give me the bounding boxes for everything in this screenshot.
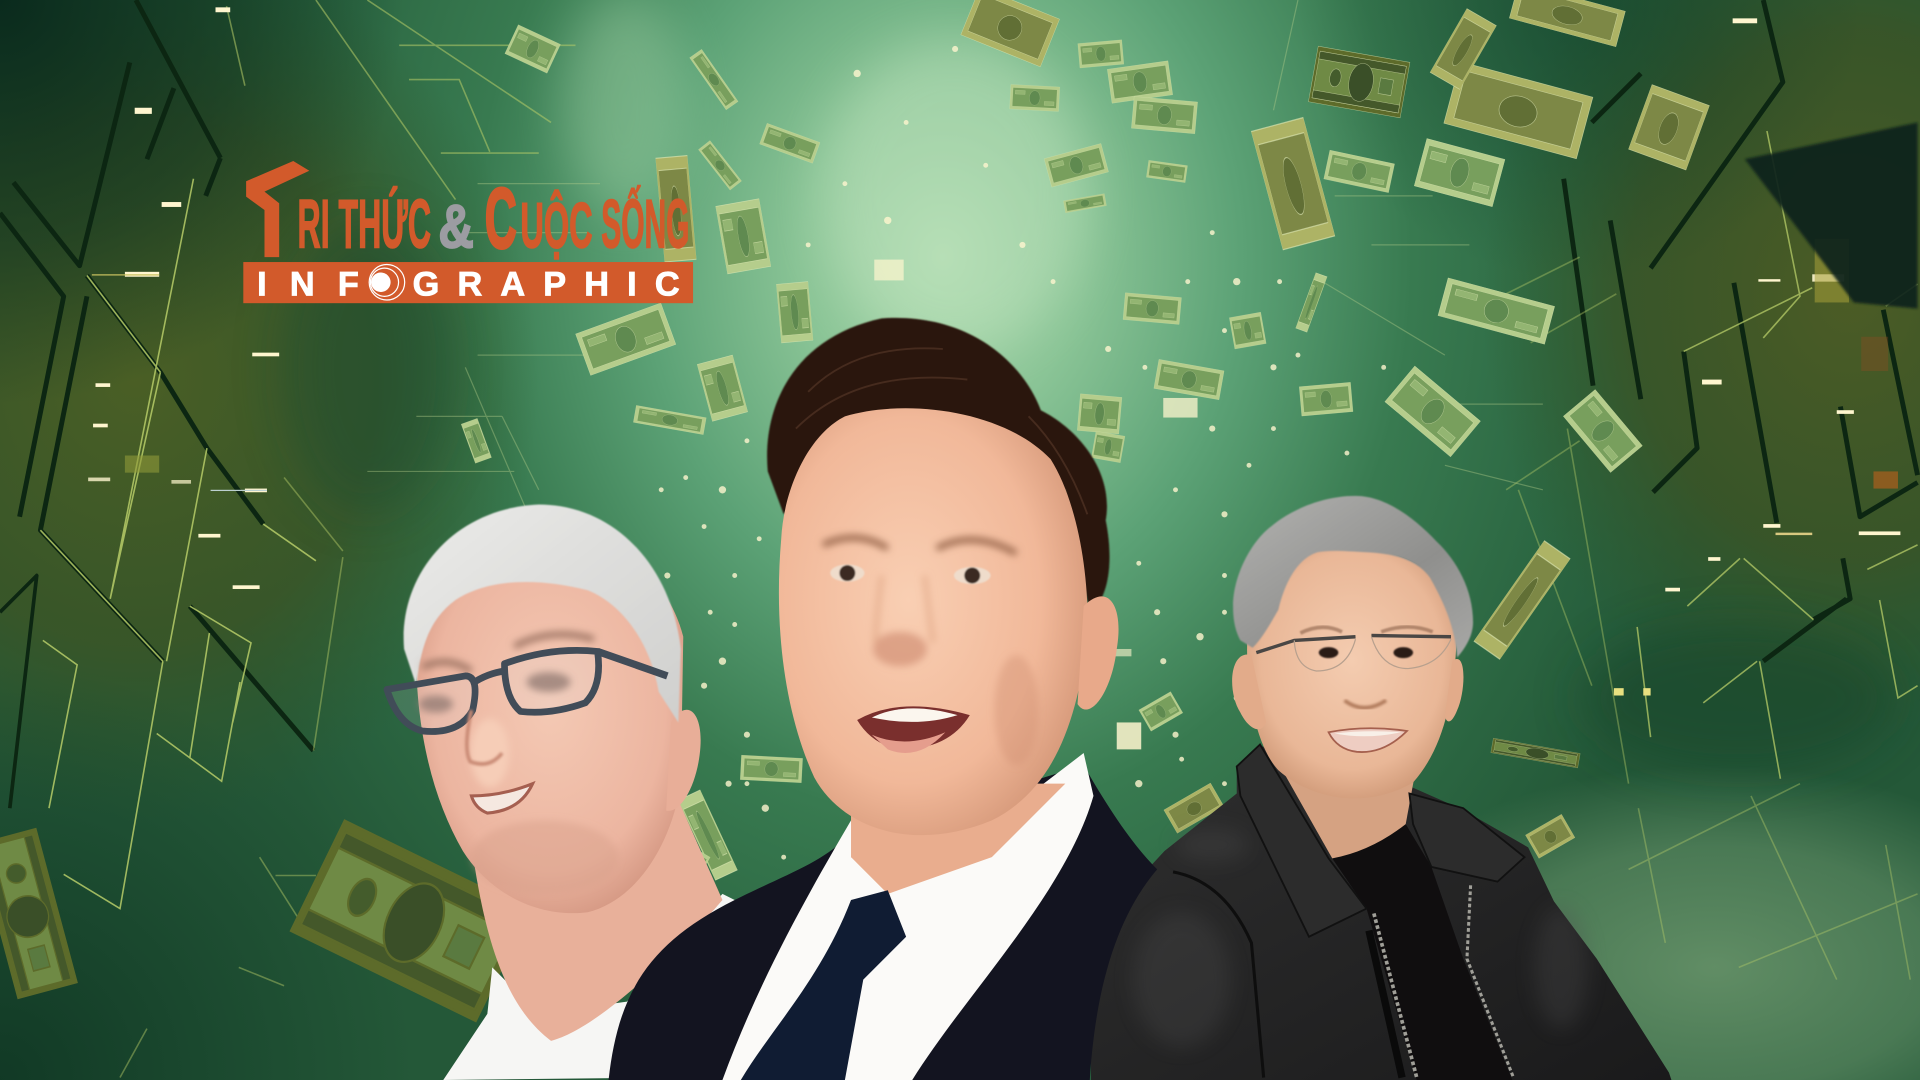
- eyes and brows: [1300, 627, 1433, 658]
- corridor grid lines: [367, 0, 1543, 539]
- zippers: [1173, 872, 1513, 1078]
- falling dollar bills: [461, 0, 1709, 883]
- suit: [609, 765, 1157, 1080]
- tie: [741, 890, 906, 1080]
- text: SỐNG: [601, 185, 689, 262]
- large olive dollar bills, bottom left: [0, 821, 529, 1021]
- left wall: bright panel lines: [40, 0, 576, 1078]
- mouth: [857, 706, 970, 749]
- logo wordmark: [298, 170, 689, 266]
- logo banner: [243, 262, 693, 303]
- logo T mark: [246, 161, 309, 257]
- portrait: right man with grey hair and leather jacket: [1091, 496, 1671, 1080]
- logo banner text: INF: [257, 266, 359, 304]
- eyes: [830, 564, 991, 584]
- shirt: [722, 753, 1093, 1080]
- logo wordmark: C: [485, 170, 517, 266]
- nose: [467, 710, 502, 764]
- t-shirt: [1332, 824, 1512, 1080]
- head: [779, 408, 1088, 835]
- leather highlights: [1133, 828, 1588, 1047]
- logo banner text: GRAPHIC: [413, 266, 680, 304]
- facial shading: [823, 538, 1038, 765]
- collars: [1237, 744, 1524, 937]
- portrait: left man with grey hair and glasses: [387, 504, 735, 1080]
- hair: [1233, 496, 1473, 658]
- logo disc icon: [369, 264, 405, 300]
- glasses: [387, 650, 667, 731]
- dark blurred shape, top right: [1745, 122, 1918, 309]
- logo: Tri Thuc & Cuoc Song Infographic: [243, 161, 693, 304]
- ears: [1232, 655, 1463, 729]
- hair: [404, 504, 681, 722]
- nose and smile: [1344, 700, 1386, 708]
- left wall: dark panel seams: [0, 0, 313, 808]
- logo banner text: [257, 266, 680, 304]
- logo wordmark: RI THỨC: [298, 185, 431, 262]
- neck: [851, 784, 1065, 894]
- logo wordmark: UỘC: [520, 190, 593, 261]
- head: [416, 536, 683, 913]
- right wall: dark panel seams: [1564, 0, 1918, 661]
- jacket: [1091, 744, 1671, 1080]
- right wall: bright panel lines: [1457, 131, 1918, 980]
- logo wordmark: &: [438, 192, 474, 260]
- shirt: [443, 894, 735, 1080]
- neck: [471, 784, 722, 1041]
- portrait: centre man with dark hair, suit and tie: [609, 318, 1157, 1080]
- hair strands: [796, 348, 1087, 514]
- glasses: [1256, 636, 1451, 671]
- smile: [471, 784, 533, 813]
- head: [1247, 548, 1457, 798]
- sparkles: [88, 7, 1900, 860]
- neck: [1280, 765, 1414, 858]
- hair back: [767, 318, 1110, 612]
- ear: [1078, 596, 1119, 710]
- ear: [666, 710, 701, 811]
- brow and face shading: [419, 634, 618, 894]
